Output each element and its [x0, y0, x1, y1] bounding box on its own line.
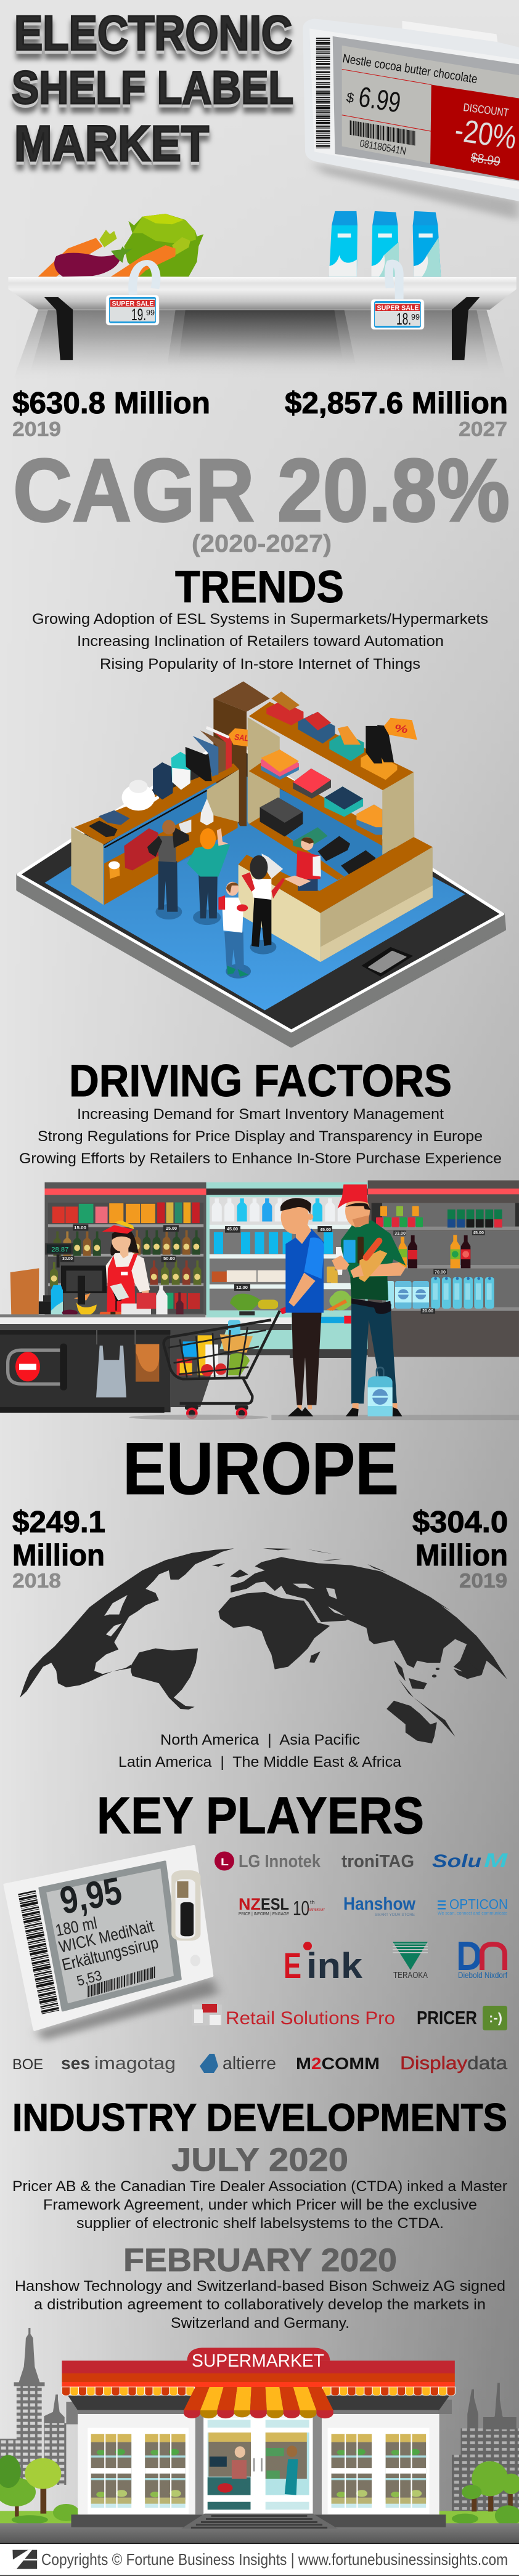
Europe 2019 value: [412, 1506, 508, 1592]
icon: milk carton: [413, 211, 441, 277]
groceries on counter: [51, 1285, 200, 1316]
shelf top: [8, 277, 517, 289]
logo: SoluM: [432, 1849, 509, 1871]
percent tag: %: [393, 722, 409, 735]
men with groceries: [280, 1184, 406, 1416]
market value 2027: [285, 387, 508, 440]
left price labels: 15.00: [74, 1226, 86, 1230]
counter base: [0, 1330, 226, 1413]
illustration: supermarket checkout: [0, 1181, 519, 1420]
shelf price labels: 33.00: [394, 1232, 406, 1236]
market value 2019: [12, 387, 210, 440]
water jug: [368, 1368, 393, 1416]
North America: [13, 1548, 234, 1726]
key players heading: KEY PLAYERS: [97, 1787, 424, 1844]
left price labels: 50.00: [163, 1257, 175, 1261]
road: [0, 2523, 519, 2543]
icon: milk carton: [329, 211, 358, 277]
device text: [54, 1870, 160, 1989]
supermarket sign text: SUPERMARKET: [192, 2351, 324, 2371]
logo: Retail Solutions Pro: [192, 2004, 395, 2029]
grass: [0, 2511, 519, 2524]
driving factors list: Increasing Demand for Smart Inventory Management: [77, 1106, 444, 1123]
logo: Opticon: [438, 1896, 508, 1916]
logo: SES-imagotag: ses: [61, 2054, 90, 2073]
logo: SoluM: M: [484, 1849, 509, 1871]
shelf price labels: 20.00: [422, 1309, 433, 1314]
development: February 2020: FEBRUARY 2020: [123, 2242, 397, 2279]
label text on device: 081180541N: [359, 137, 407, 157]
left price tags: [60, 1224, 255, 1315]
logo: Diebold Nixdorf: [458, 1942, 507, 1980]
trends list: [32, 611, 488, 672]
driving factors list: Growing Efforts by Retailers to Enhance In-Store Purchase Experience: [19, 1150, 502, 1167]
trends list: Rising Popularity of In-store Internet of Things: [100, 656, 420, 672]
illustration: shelf with produce and labels: [8, 211, 517, 380]
centre chiller: [206, 1182, 369, 1355]
price tag: 18.99: SUPER SALE: [377, 304, 419, 312]
logo: altierre: altierre: [223, 2054, 276, 2073]
shadow under shelf: [13, 310, 507, 380]
right shelf unit: [248, 692, 417, 880]
illustration: electronic shelf label device: [303, 18, 519, 220]
development: February 2020: a distribution agreement to collaboratively develop the markets in: [34, 2296, 486, 2313]
price tag: 19.99: 19.: [131, 305, 146, 324]
illustration: e-paper price tag device: [5, 1846, 218, 2041]
market value 2019: 2019: [12, 418, 61, 440]
CAGR: (2020-2027): [192, 530, 332, 557]
water bottles: [386, 1277, 494, 1309]
development: February 2020: Switzerland and Germany.: [171, 2315, 349, 2332]
device text: WICK MediNait: [57, 1916, 156, 1956]
store building: [68, 2396, 449, 2514]
shelf price labels: [320, 1228, 484, 1314]
logo: NZESL 10th: PRICE | INFORM | ENGAGE: [239, 1911, 289, 1916]
logo: E Ink: E: [284, 1946, 301, 1986]
shelf price labels: 45.00: [320, 1228, 331, 1232]
logo: SES-imagotag: [61, 2054, 176, 2073]
folded clothes: [261, 749, 382, 835]
icon: left bracket: [44, 297, 73, 360]
Africa: [218, 1592, 330, 1670]
development: July 2020: [12, 2142, 507, 2232]
Europe 2019 value: 2019: [459, 1569, 507, 1592]
store steps and base: [71, 2514, 446, 2529]
logo: Opticon: We scan, connect and communicate: [438, 1912, 507, 1916]
price tag: 18.99: [371, 299, 424, 329]
Europe 2018 value: [12, 1506, 105, 1592]
vegetables and basket details: [290, 1267, 351, 1358]
logo: Fortune Business Insights: [12, 2550, 37, 2569]
Europe heading: EUROPE: [123, 1427, 399, 1510]
price tag: 19.99: 99: [146, 308, 155, 317]
trends heading: TRENDS: [175, 562, 344, 612]
logo: NZESL 10th: [239, 1895, 325, 1920]
Europe 2018 value: 2018: [12, 1569, 61, 1592]
logo: Opticon: OPTICON: [449, 1896, 508, 1912]
illustration: supermarket storefront: [0, 2328, 519, 2543]
Australia: [386, 1701, 437, 1743]
products on left shelf: [89, 726, 232, 879]
shelf price labels: 45.00: [473, 1231, 484, 1235]
logo: LG Innotek: LG Innotek: [239, 1852, 321, 1871]
store doors: [195, 2414, 322, 2514]
other regions: [118, 1732, 402, 1770]
development: February 2020: [15, 2242, 505, 2332]
logo: NZESL 10th: NZ: [239, 1895, 261, 1913]
illustration: isometric shop on tablet: [18, 681, 504, 1046]
title: ELECTRONIC: [14, 6, 292, 60]
logo: Displaydata: Display data: [400, 2053, 507, 2073]
development: February 2020: Hanshow Technology and Switzerland-based Bison Schweiz AG signed: [15, 2278, 505, 2295]
left price labels: [62, 1226, 248, 1290]
price tag: 18.99: 18.: [396, 310, 411, 328]
left and centre shelving: [44, 1182, 369, 1355]
title: [12, 6, 293, 172]
icon: cabbage: [124, 214, 203, 277]
market value 2027: $2,857.6 Million: [285, 387, 508, 420]
Europe 2019 value: $304.0: [412, 1506, 508, 1539]
man in blue shirt: [280, 1198, 324, 1416]
shopper at counter: [242, 855, 285, 955]
counter top: [0, 1314, 292, 1343]
Indonesian and Pacific islands: [394, 1597, 483, 1737]
electronics: [260, 797, 375, 874]
logo: NZESL 10th: th: [310, 1899, 315, 1905]
logo: SES-imagotag: imagotag: [94, 2054, 176, 2073]
logo: Teraoka: TERAOKA: [393, 1970, 428, 1980]
logo: NZESL 10th: ESL: [261, 1895, 289, 1913]
footer: [0, 2543, 519, 2576]
floor shadows: [129, 1415, 519, 1420]
device text: 5,53: [75, 1967, 104, 1989]
striped entrance canopy: [184, 2387, 333, 2418]
logo: Pricer: [417, 2006, 507, 2030]
label text on device: [341, 52, 518, 169]
Arctic islands and UK: [212, 1548, 387, 1578]
city skyline right: [439, 2383, 519, 2513]
icon: carrot: [111, 237, 190, 277]
right shelving: [317, 1181, 519, 1357]
logo: troniTAG: troniTAG: [341, 1852, 414, 1871]
logo: Pricer: :-): [489, 2010, 502, 2025]
shopper with orange hair: [187, 828, 230, 925]
Eurasia: [231, 1557, 507, 1679]
device text: Erkältungssirup: [60, 1933, 160, 1974]
checkout counter, cashier and groceries: [0, 1221, 295, 1419]
device text: 9,95: [57, 1870, 125, 1923]
title: SHELF LABEL: [12, 62, 293, 113]
clerk: [284, 837, 321, 891]
plastic bag: [96, 1346, 126, 1397]
left price labels: 12.00: [236, 1286, 248, 1290]
left shelf unit: [71, 726, 259, 905]
Europe 2019 value: Million: [415, 1539, 508, 1572]
brown shopping bag: [136, 1344, 159, 1382]
label text on device: 6.99: [356, 81, 403, 119]
logo: BOE: BOE: [12, 2056, 43, 2073]
man in green shirt: [332, 1184, 406, 1416]
title: MARKET: [14, 116, 209, 172]
icon: eggplant: [54, 246, 133, 277]
paper bag: [10, 1268, 39, 1316]
South America: [131, 1649, 198, 1710]
shopper in white shirt: [218, 882, 251, 979]
counter: [239, 837, 433, 962]
logo: Hanshow: Hanshow: [343, 1894, 415, 1914]
canned goods: [376, 1206, 502, 1227]
price tag: 19.99: [106, 295, 159, 325]
label text on device: $: [345, 89, 355, 106]
driving factors list: [19, 1106, 502, 1167]
label text on device: $8.99: [470, 150, 501, 169]
shopper with beard: [147, 820, 189, 919]
cash register: 28.87: [51, 1246, 68, 1254]
logo: LG Innotek: [215, 1851, 321, 1871]
city skyline left: [0, 2328, 78, 2485]
logo: NZESL 10th: ANNIVERSARY: [308, 1908, 325, 1912]
shopping cart: [164, 1304, 295, 1419]
icon: carrot: [38, 230, 117, 277]
gate with no-entry sign: [8, 1344, 67, 1391]
store windows: [88, 2428, 429, 2514]
logo: Diebold Nixdorf: Diebold Nixdorf: [458, 1970, 507, 1980]
Madagascar: [309, 1652, 321, 1663]
awning: [62, 2348, 455, 2396]
cash register: [39, 1243, 107, 1314]
shoes and boxes: [266, 692, 397, 780]
shelf price labels: 70.00: [435, 1270, 446, 1275]
label text on device: Nestle cocoa butter chocolate: [341, 52, 478, 86]
logo: NZESL 10th: 10: [293, 1897, 309, 1920]
driving factors heading: DRIVING FACTORS: [69, 1056, 452, 1106]
left shelving: [44, 1182, 206, 1315]
logo: E Ink: ink: [306, 1946, 363, 1986]
device text: 180 ml: [54, 1913, 99, 1940]
trends list: Increasing Inclination of Retailers toward Automation: [77, 633, 444, 650]
left price labels: 30.00: [62, 1257, 73, 1261]
soda bottles: [399, 1235, 470, 1268]
logo: M2COMM: M2COMM: [296, 2054, 380, 2073]
price tag: 19.99: SUPER SALE: [112, 301, 154, 308]
sale tag: [229, 728, 259, 748]
logo: Teraoka: [393, 1942, 428, 1980]
icon: right bracket: [452, 297, 480, 360]
icon: milk carton: [372, 211, 399, 277]
price tag: 18.99: 99: [411, 312, 420, 321]
market value 2027: 2027: [459, 418, 507, 440]
driving factors list: Strong Regulations for Price Display and Transparency in Europe: [38, 1128, 483, 1145]
left price labels: 25.00: [166, 1227, 177, 1231]
market value 2019: $630.8 Million: [12, 387, 210, 420]
logo: SoluM: Solu: [432, 1851, 481, 1871]
tablet: [18, 739, 504, 1046]
Europe 2018 value: $249.1: [12, 1506, 105, 1539]
icon: clear hook: [133, 263, 156, 295]
world map: [13, 1548, 507, 1743]
logo: Hanshow: SMART YOUR STORE: [375, 1913, 415, 1917]
percent tag: [384, 718, 417, 740]
trees right: [452, 2461, 519, 2526]
price tags: [317, 1226, 485, 1314]
development: July 2020: supplier of electronic shelf labelsystems to the CTDA.: [76, 2215, 444, 2232]
development: July 2020: JULY 2020: [171, 2142, 348, 2178]
icon: clear hook: [389, 262, 399, 299]
sale tag: SALE: [234, 732, 255, 743]
logo: altierre: [200, 2054, 276, 2073]
logo: Retail Solutions Pro: Retail Solutions Pro: [226, 2008, 395, 2029]
brown column: [213, 681, 270, 826]
development: July 2020: Pricer AB & the Canadian Tire Dealer Association (CTDA) inked a Master: [12, 2178, 507, 2195]
left price labels: 45.00: [227, 1227, 238, 1232]
Europe 2018 value: Million: [12, 1539, 105, 1572]
development: July 2020: Framework Agreement, under which Pricer will be the exclusive: [43, 2197, 477, 2213]
logo: Pricer: PRICER: [417, 2007, 477, 2029]
trends list: Growing Adoption of ESL Systems in Supermarkets/Hypermarkets: [32, 611, 488, 628]
trees left: [0, 2455, 80, 2524]
logo: E Ink: [284, 1942, 363, 1986]
other regions: North America | Asia Pacific: [160, 1732, 360, 1748]
cashier: [102, 1221, 150, 1312]
shelf underside: [8, 289, 517, 310]
logo: LG Innotek: L: [221, 1856, 229, 1868]
other regions: Latin America | The Middle East & Africa: [118, 1754, 402, 1770]
